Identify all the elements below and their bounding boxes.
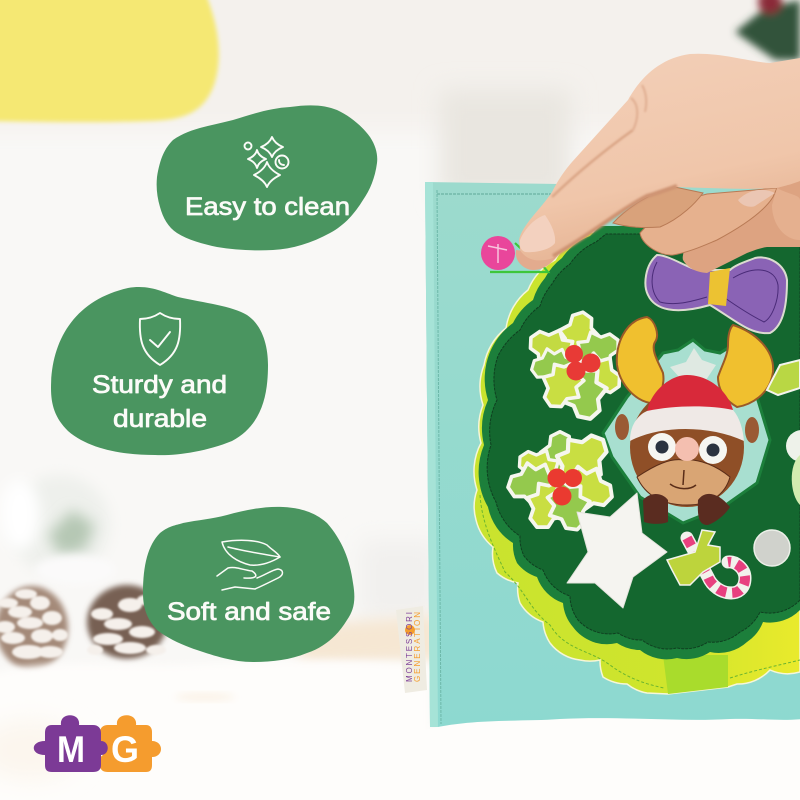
snow in front of book [420, 718, 800, 800]
silver ball [754, 530, 790, 566]
wooden table strip [300, 615, 440, 665]
brand tag: MONTESSORI [405, 612, 414, 682]
wreath green [479, 226, 800, 659]
badge: sturdy and durable [51, 287, 268, 455]
teal felt page [425, 182, 800, 727]
snowman edge [786, 430, 800, 505]
label: Sturdy and [92, 371, 227, 399]
candy cane ornament [667, 530, 745, 593]
icon: sparkles and bubbles [244, 137, 288, 187]
finger under thumb tip [516, 250, 558, 270]
white star [567, 493, 667, 608]
wreath back layer: lime scallops [474, 232, 800, 694]
logo: MG puzzle pieces: M [57, 729, 85, 770]
label: Easy to clean [185, 193, 350, 221]
icon: leaf over hand [217, 540, 282, 590]
centre opening [603, 340, 770, 523]
right holly leaf [767, 360, 800, 395]
blurred Christmas tree [735, 0, 800, 60]
wreath dark felt [487, 234, 800, 649]
thumbnail [520, 215, 555, 252]
label: Soft and safe [167, 598, 331, 626]
logo: MG puzzle pieces [34, 715, 161, 772]
wreath strap [663, 655, 728, 694]
logo: MG puzzle pieces: G [111, 729, 139, 770]
holly 1 [521, 309, 629, 425]
badge: easy to clean [157, 105, 377, 250]
badge: sturdy and durable: durable [113, 405, 207, 433]
moose [615, 317, 773, 525]
hand [516, 54, 800, 273]
pine cones [0, 585, 167, 670]
holly 2 [505, 422, 619, 537]
snow foreground [0, 660, 800, 800]
felt book [396, 182, 800, 727]
blurred yellow shape [0, 0, 219, 122]
bow [645, 255, 787, 333]
button and elastic [481, 236, 548, 272]
brand tag: GENERATION [413, 612, 422, 682]
icon: shield check [140, 313, 180, 365]
badge: soft and safe [143, 507, 354, 662]
lime stitching [480, 495, 800, 688]
thumb and back of hand [519, 54, 800, 260]
pale star behind moose [670, 348, 716, 380]
lower fingers [683, 170, 800, 273]
blurred glass ornament [0, 475, 115, 585]
brand tag [396, 606, 427, 693]
